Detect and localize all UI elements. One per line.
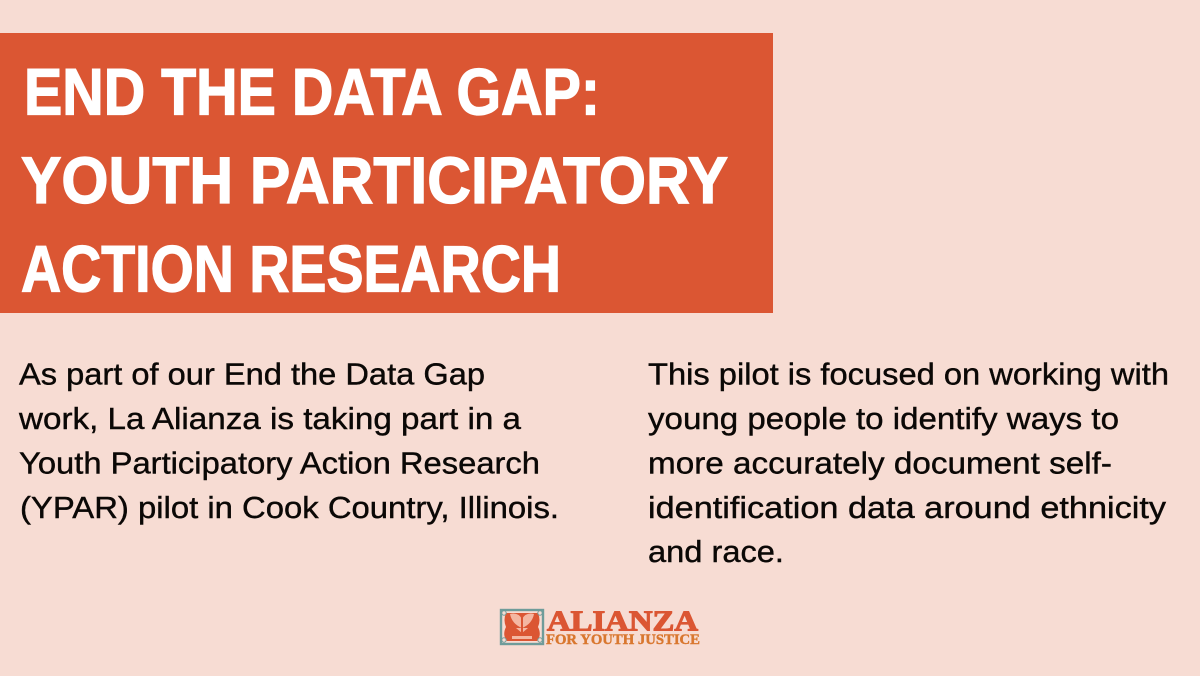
text block: right paragraph: This pilot is focused on working with [648,356,1169,392]
title: END THE DATA GAP: [24,54,600,128]
text block: right paragraph [648,356,1169,569]
title: YOUTH PARTICIPATORY [21,143,728,217]
logo: Alianza for Youth Justice [501,606,700,648]
text block: right paragraph: more accurately document self- [648,446,1112,480]
logo wordmark: ALIANZA [547,606,698,638]
title: ACTION RESEARCH [21,232,561,306]
title banner [0,33,773,313]
text block: left paragraph: (YPAR) pilot in Cook Country, Illinois. [20,490,559,525]
text block: right paragraph: young people to identify ways to [648,401,1119,436]
title [21,54,728,306]
text block: right paragraph: identification data around ethnicity [648,490,1167,525]
logo tagline: FOR YOUTH JUSTICE [546,632,700,648]
text block: left paragraph [18,356,559,525]
text block: left paragraph: As part of our End the Data Gap [19,356,485,392]
text block: left paragraph: Youth Participatory Action Research [19,446,540,480]
text block: left paragraph: work, La Alianza is taking part in a [18,401,522,436]
icon: framed butterfly emblem [501,610,543,644]
text block: right paragraph: and race. [648,534,784,569]
